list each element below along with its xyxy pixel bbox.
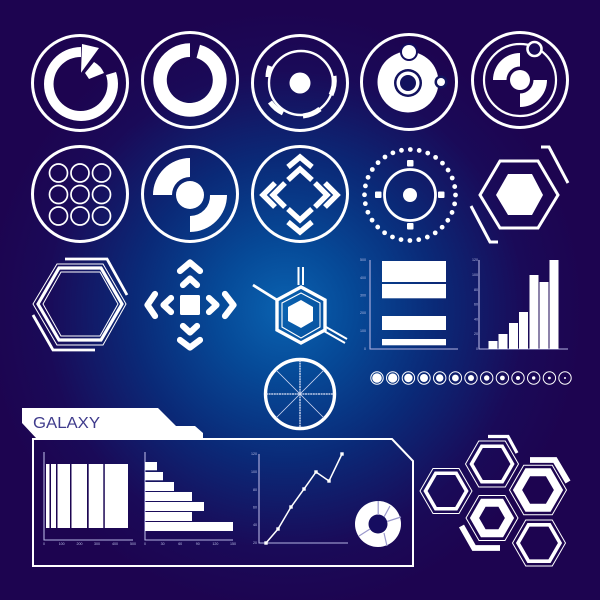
chart: horizontal block bars: 400 (360, 276, 366, 280)
chart: rising column bars (472, 258, 568, 351)
hexagon left (420, 468, 472, 514)
chart: horizontal block bars (360, 258, 458, 351)
chart: rising column bars: 40 (474, 318, 478, 322)
chart: rising column bars: 80 (474, 288, 478, 292)
chart: vertical stripe bars: 200 (76, 542, 82, 546)
chart: rising column bars: 60 (474, 302, 478, 306)
hexagon right thick (510, 460, 568, 515)
icon: concentric arcs with small ring (472, 32, 568, 128)
icon: gear ring with dot (252, 36, 348, 130)
chart: rising column bars: 0 (476, 347, 478, 351)
icon row: shrinking dots (371, 372, 571, 384)
chart: vertical stripe bars: 500 (130, 542, 136, 546)
icon: two arcs with centre dot (142, 146, 238, 242)
title tab: GALAXY: GALAXY (33, 415, 100, 432)
icon: molecule hexagon (253, 267, 347, 343)
panel frame (33, 439, 413, 566)
chart: horizontal bars: 60 (178, 542, 182, 546)
icon: directional arrows pad (148, 262, 234, 348)
chart: vertical stripe bars: 300 (94, 542, 100, 546)
hexagon centre thick (462, 496, 518, 548)
chart: rising column bars: 100 (472, 273, 478, 277)
chart: horizontal bars (144, 452, 236, 546)
icon cluster: hexagons (420, 436, 568, 566)
chart: vertical stripe bars: 100 (59, 542, 65, 546)
chart: horizontal bars: 30 (161, 542, 165, 546)
chart: line chart: 40 (253, 523, 257, 527)
hexagon top (466, 436, 518, 487)
icon: radar circle (266, 360, 334, 428)
chart: rising column bars: 20 (474, 332, 478, 336)
chart: horizontal block bars: 500 (360, 258, 366, 262)
icon: nested hexagon outline (33, 259, 127, 350)
icon: circle with double chevrons (252, 146, 348, 242)
icon: solid hexagon with brackets (471, 147, 568, 242)
chart: horizontal bars: 0 (144, 542, 146, 546)
chart: horizontal bars: 150 (230, 542, 236, 546)
icon: open donut ring (142, 32, 238, 128)
chart: rising column bars: 120 (472, 258, 478, 262)
icon: dotted target (364, 150, 456, 240)
chart: line chart: 120 (251, 452, 257, 456)
hexagon bottom right (512, 520, 566, 566)
chart: horizontal bars: 90 (196, 542, 200, 546)
chart: line chart: 60 (253, 506, 257, 510)
chart: line chart: 100 (251, 470, 257, 474)
chart: horizontal block bars: 200 (360, 311, 366, 315)
chart: horizontal bars: 120 (212, 542, 218, 546)
icon: planet disc with orbiting dots (362, 34, 456, 130)
chart: vertical stripe bars: 400 (112, 542, 118, 546)
chart: donut (355, 501, 401, 547)
chart: vertical stripe bars (43, 452, 136, 546)
chart: line chart (251, 452, 348, 545)
icon: ring with wedges (32, 36, 128, 130)
chart: line chart: 80 (253, 488, 257, 492)
chart: horizontal block bars: 100 (360, 329, 366, 333)
chart: horizontal block bars: 300 (360, 294, 366, 298)
chart: horizontal block bars: 0 (364, 347, 366, 351)
chart: vertical stripe bars: 0 (43, 542, 45, 546)
icon: nine circle grid (32, 146, 128, 242)
title tab: GALAXY (22, 408, 203, 439)
chart: line chart: 20 (253, 541, 257, 545)
